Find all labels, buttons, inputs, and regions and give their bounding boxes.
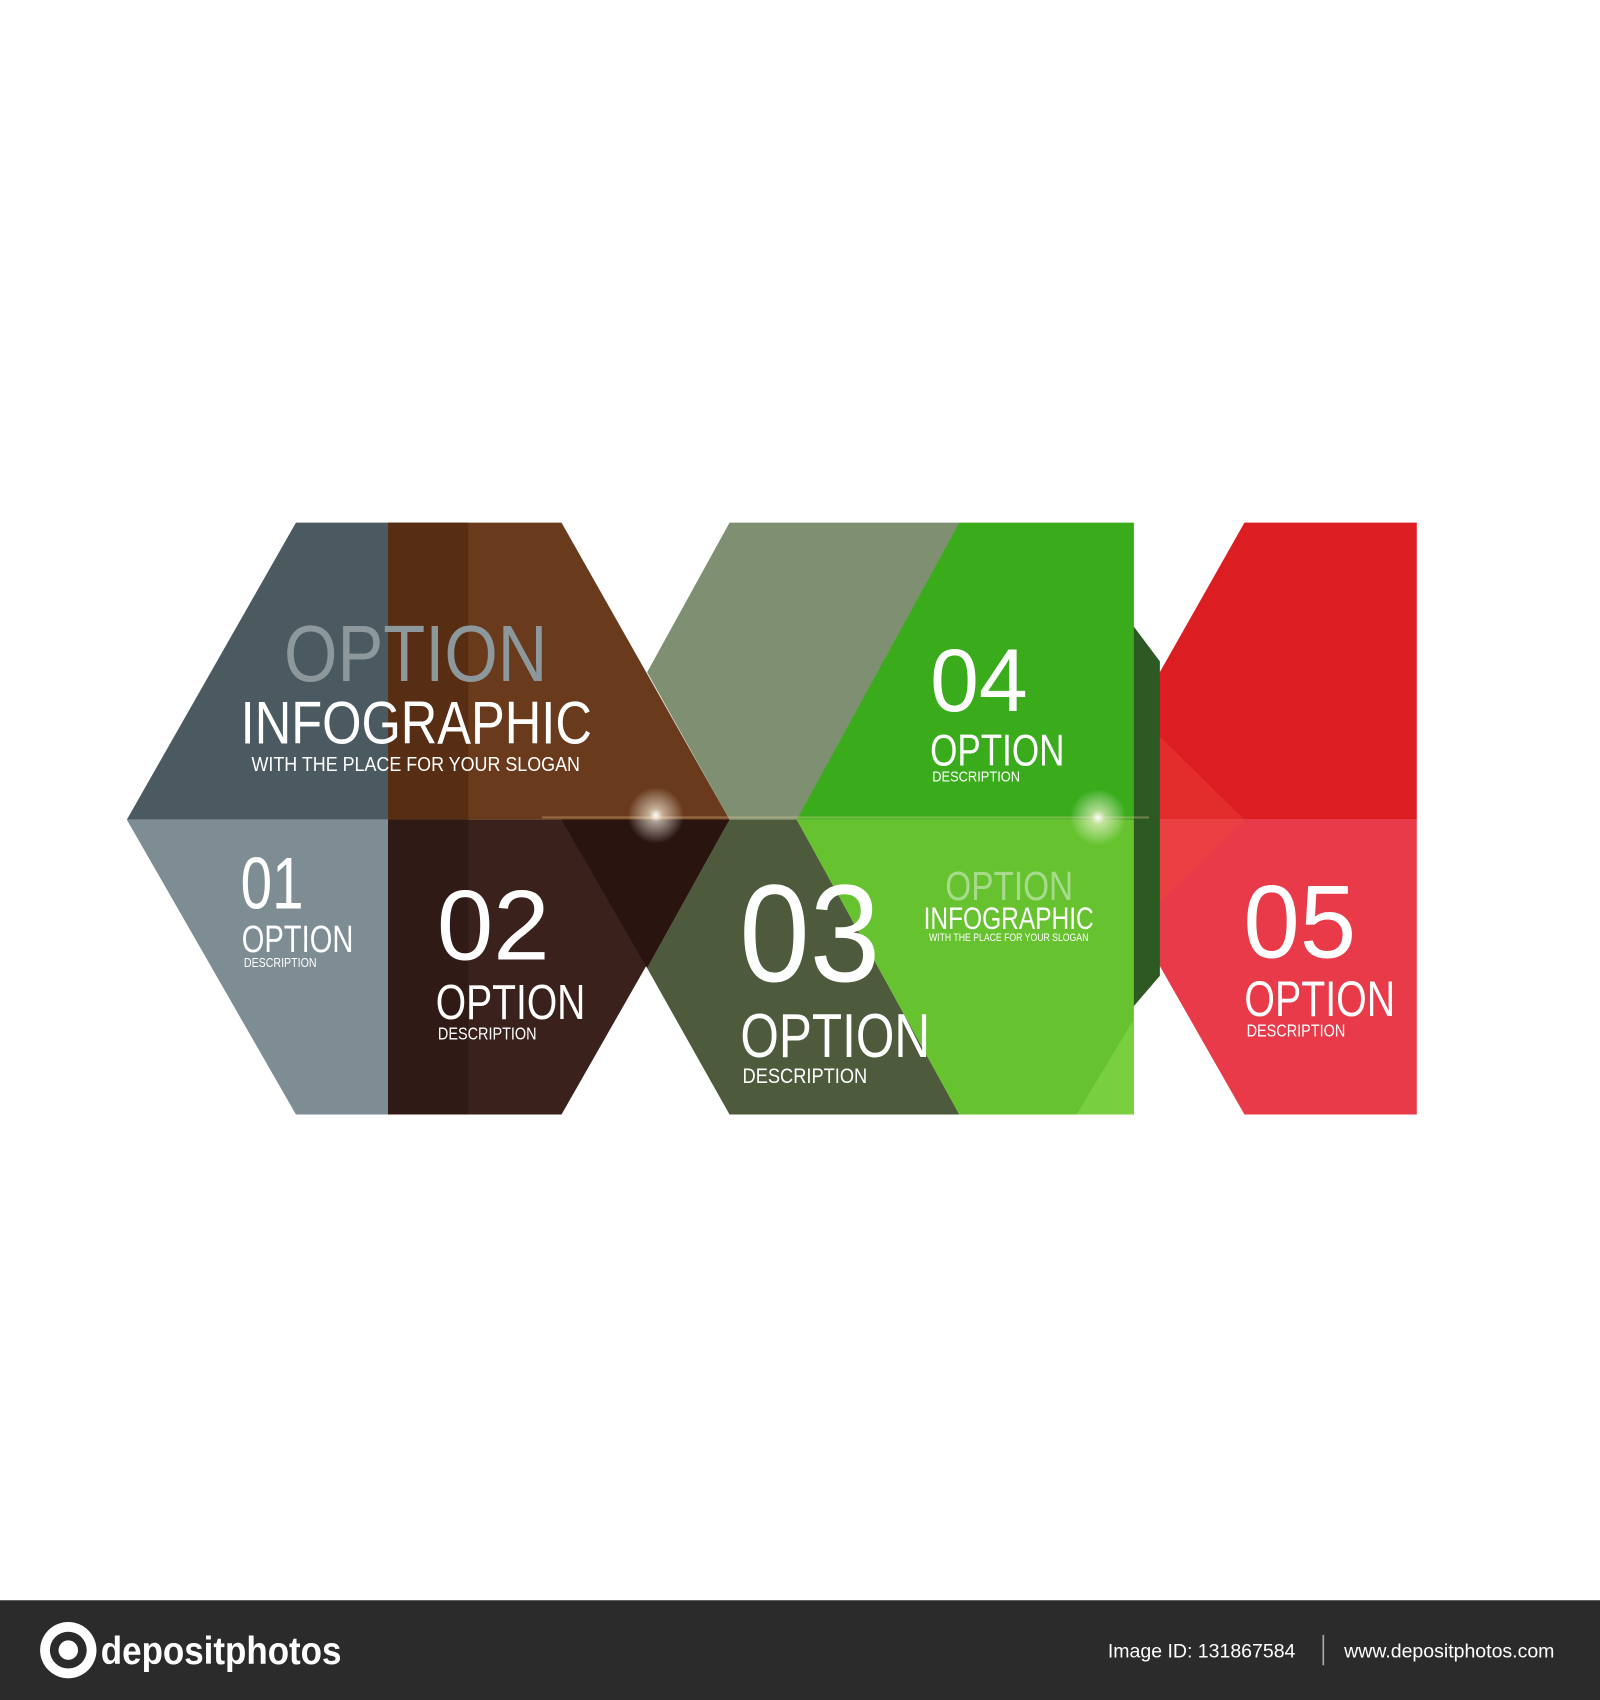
- text: small infographic slogan: [924, 863, 1094, 944]
- text: option 01: [241, 842, 353, 970]
- text: option 04: [930, 631, 1064, 786]
- text: option 03: 03: [739, 856, 880, 1011]
- text: small infographic slogan: WITH THE PLACE FOR YOUR SLOGAN: [929, 932, 1088, 944]
- footer bar: Image ID: 131867584: [1108, 1641, 1296, 1663]
- text: option 04: DESCRIPTION: [932, 769, 1020, 786]
- text: option 04: OPTION: [930, 726, 1064, 775]
- text: option 01: DESCRIPTION: [244, 955, 317, 970]
- text: option 02: OPTION: [436, 976, 585, 1030]
- text: option 01: 01: [241, 842, 304, 925]
- text: option 05: DESCRIPTION: [1247, 1020, 1345, 1040]
- text: option 03: OPTION: [740, 1002, 930, 1071]
- panel: red option 05: [1076, 523, 1417, 1115]
- text: option 05: [1243, 864, 1395, 1040]
- text: option 04: 04: [930, 631, 1028, 730]
- title block: [241, 608, 592, 776]
- footer bar: [0, 1600, 1600, 1700]
- panel: dark green sliver: [1127, 618, 1160, 1014]
- text: option 02: 02: [437, 870, 550, 982]
- panel: olive option 03: [647, 523, 959, 1115]
- text: option 05: 05: [1243, 864, 1356, 980]
- panel: gray option 01: [127, 523, 388, 1115]
- text: small infographic slogan: INFOGRAPHIC: [924, 901, 1094, 936]
- title block: OPTION: [284, 608, 547, 698]
- text: option 03: [739, 856, 930, 1088]
- footer bar: www.depositphotos.com: [1343, 1641, 1554, 1663]
- text: option 02: [436, 870, 585, 1044]
- text: option 01: OPTION: [242, 919, 353, 961]
- footer bar: depositphotos: [101, 1630, 341, 1673]
- title block: INFOGRAPHIC: [241, 689, 592, 757]
- text: option 02: DESCRIPTION: [438, 1024, 537, 1044]
- text: small infographic slogan: OPTION: [945, 863, 1073, 909]
- text: option 03: DESCRIPTION: [743, 1063, 867, 1088]
- title block: WITH THE PLACE FOR YOUR SLOGAN: [251, 753, 580, 776]
- text: option 05: OPTION: [1244, 971, 1395, 1027]
- panel: green option 04: [797, 523, 1134, 1115]
- icon: depositphotos logo: [40, 1622, 96, 1678]
- panel: brown option 02: [388, 523, 730, 1115]
- glow highlights: [542, 787, 1149, 846]
